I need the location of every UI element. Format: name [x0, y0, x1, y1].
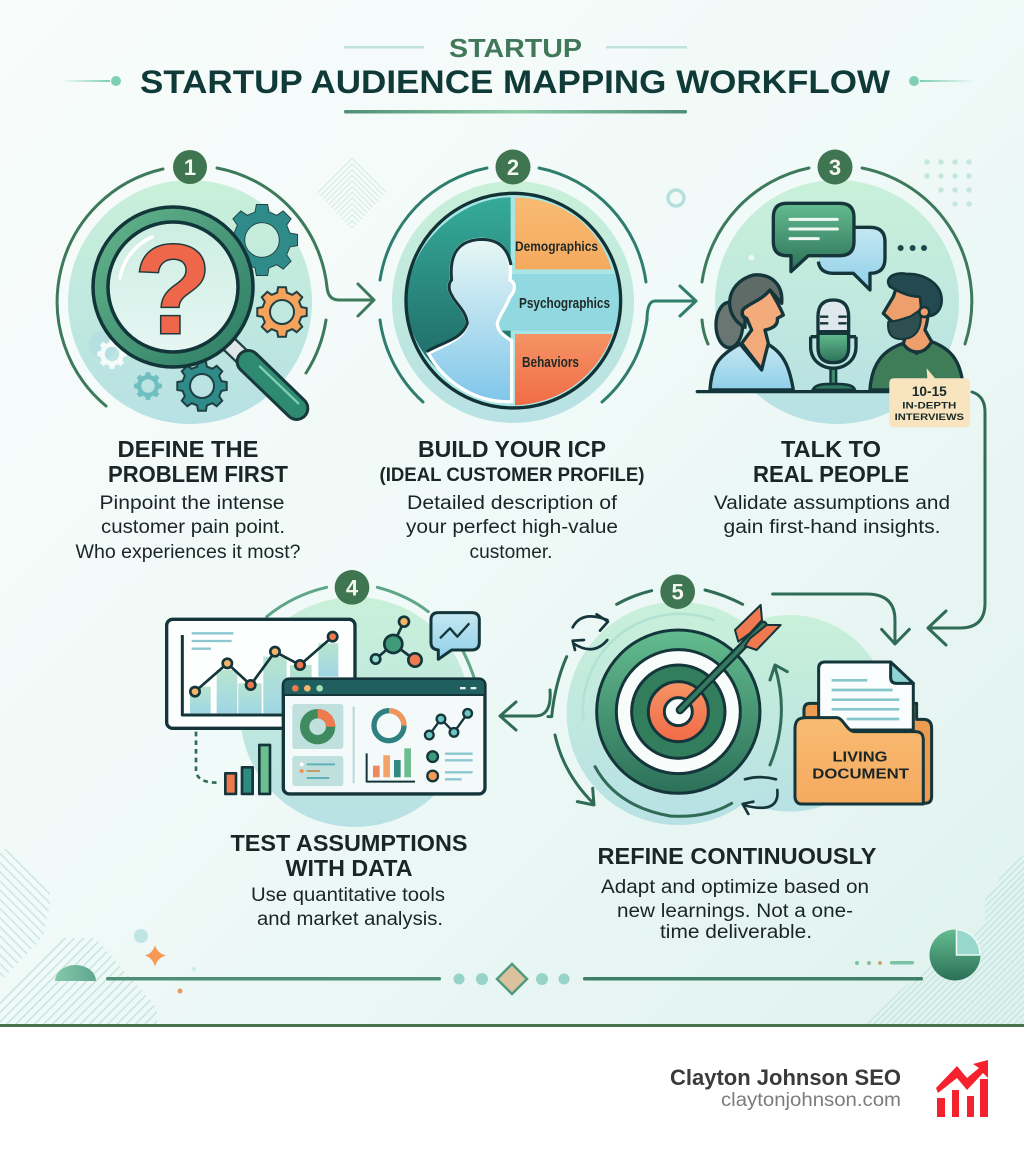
step 1 text — [76, 436, 300, 563]
bottom divider ornament — [55, 929, 980, 994]
blobs — [692, 615, 888, 812]
step 5: refine continuously — [548, 574, 932, 825]
step 2 text: your perfect high-value — [406, 517, 618, 538]
ring arcs and arrows — [548, 590, 909, 816]
target with arrow — [597, 605, 781, 793]
step 5 text: Adapt and optimize based on — [601, 877, 869, 898]
blue speech bubble — [818, 227, 885, 290]
step 1 text: Who experiences it most? — [76, 542, 300, 563]
step 3 text: gain first-hand insights. — [724, 517, 940, 538]
decorative hatch corners — [0, 155, 1024, 1024]
arrow 1 to 2 — [339, 284, 374, 316]
blob — [715, 180, 959, 424]
main title: STARTUP AUDIENCE MAPPING WORKFLOW — [140, 64, 891, 100]
step 2 text: Detailed description of — [407, 493, 618, 514]
step 5 text: time deliverable. — [660, 922, 812, 943]
connector into folder — [773, 594, 895, 643]
step 4 text: Use quantitative tools — [251, 885, 445, 906]
gears — [134, 204, 307, 411]
step 3 text: Validate assumptions and — [714, 493, 950, 514]
step 4 text: TEST ASSUMPTIONS — [230, 830, 468, 856]
ring arcs — [702, 168, 972, 344]
segment labels: Behaviors — [522, 355, 579, 371]
step 3 text: TALK TO — [781, 436, 881, 462]
dashboard illustration — [167, 570, 485, 794]
step 4 text: and market analysis. — [257, 909, 443, 930]
connector 3 to 5 — [928, 392, 985, 645]
segment labels: Psychographics — [519, 296, 610, 312]
living document folder — [795, 662, 932, 804]
step 1 text: Pinpoint the intense — [100, 493, 284, 514]
step 5 text: REFINE CONTINUOUSLY — [598, 843, 876, 869]
badge 4: 4 — [346, 575, 359, 600]
brand name: Clayton Johnson SEO — [670, 1065, 901, 1090]
badge 1: 1 — [184, 155, 196, 180]
folder label — [812, 750, 909, 782]
step 2 text: (IDEAL CUSTOMER PROFILE) — [380, 465, 644, 486]
table line — [697, 387, 893, 397]
arrow 5 to 4 — [500, 690, 550, 730]
step 4: test assumptions — [167, 570, 485, 827]
step 2 text: customer. — [470, 542, 552, 563]
step 5 text: new learnings. Not a one- — [617, 901, 853, 922]
profile pie — [406, 193, 621, 408]
bar icon with dashed connector — [196, 732, 270, 794]
segment labels: Demographics — [515, 238, 598, 254]
dot grid — [924, 159, 972, 207]
interviews tag: 10-15 — [912, 384, 947, 399]
step 1 text: customer pain point. — [101, 517, 285, 538]
chart bubble — [431, 613, 479, 659]
ring arcs — [57, 168, 339, 406]
interview illustration — [697, 203, 970, 427]
blob — [392, 181, 634, 423]
cycle icons — [573, 614, 777, 814]
small ornaments — [214, 190, 684, 209]
step 3 text — [714, 436, 950, 538]
badge 3: 3 — [829, 155, 841, 180]
ring arcs — [380, 168, 696, 402]
blob — [240, 597, 470, 827]
badge 2 — [496, 150, 530, 184]
badge 5: 5 — [672, 580, 684, 605]
step 3: talk to real people — [697, 150, 972, 427]
microphone — [821, 368, 845, 385]
magnifying glass: ? — [135, 219, 211, 360]
magnifying glass — [93, 207, 298, 408]
interviews tag — [889, 368, 970, 427]
green speech bubble — [773, 203, 854, 272]
step 1 text: PROBLEM FIRST — [108, 461, 288, 487]
title block — [60, 33, 975, 114]
interviews tag: IN-DEPTH — [902, 400, 957, 410]
man — [870, 342, 963, 390]
blob — [68, 180, 312, 424]
step 1 text: DEFINE THE — [118, 436, 258, 462]
badge 5 — [660, 574, 695, 609]
eyebrow: STARTUP — [449, 33, 582, 63]
badge 2: 2 — [507, 155, 519, 180]
folder label: DOCUMENT — [812, 766, 909, 782]
line chart panel — [167, 619, 355, 728]
step 4 text: WITH DATA — [286, 855, 412, 881]
step 2 text: BUILD YOUR ICP — [418, 436, 606, 462]
step 2 text — [380, 436, 644, 563]
interviews tag: INTERVIEWS — [895, 412, 964, 422]
faint white gear — [89, 331, 127, 369]
badge 3 — [818, 150, 852, 184]
badge 4 — [335, 570, 369, 605]
step 3 text: REAL PEOPLE — [753, 461, 909, 487]
folder label: LIVING — [832, 750, 887, 766]
silhouette — [428, 239, 514, 402]
segment labels — [515, 238, 610, 371]
network icon — [371, 617, 422, 667]
step 1: define the problem — [57, 150, 339, 424]
brand url: claytonjohnson.com — [721, 1090, 901, 1111]
logo icon — [936, 1060, 988, 1117]
footer — [0, 1024, 1024, 1154]
ring arcs — [267, 587, 475, 680]
step 4 text — [230, 830, 468, 930]
step 5 text — [598, 843, 876, 943]
badge 1 — [173, 150, 207, 184]
dashboard window — [283, 679, 485, 794]
woman — [716, 302, 743, 348]
step 2: build your ICP — [380, 150, 696, 423]
